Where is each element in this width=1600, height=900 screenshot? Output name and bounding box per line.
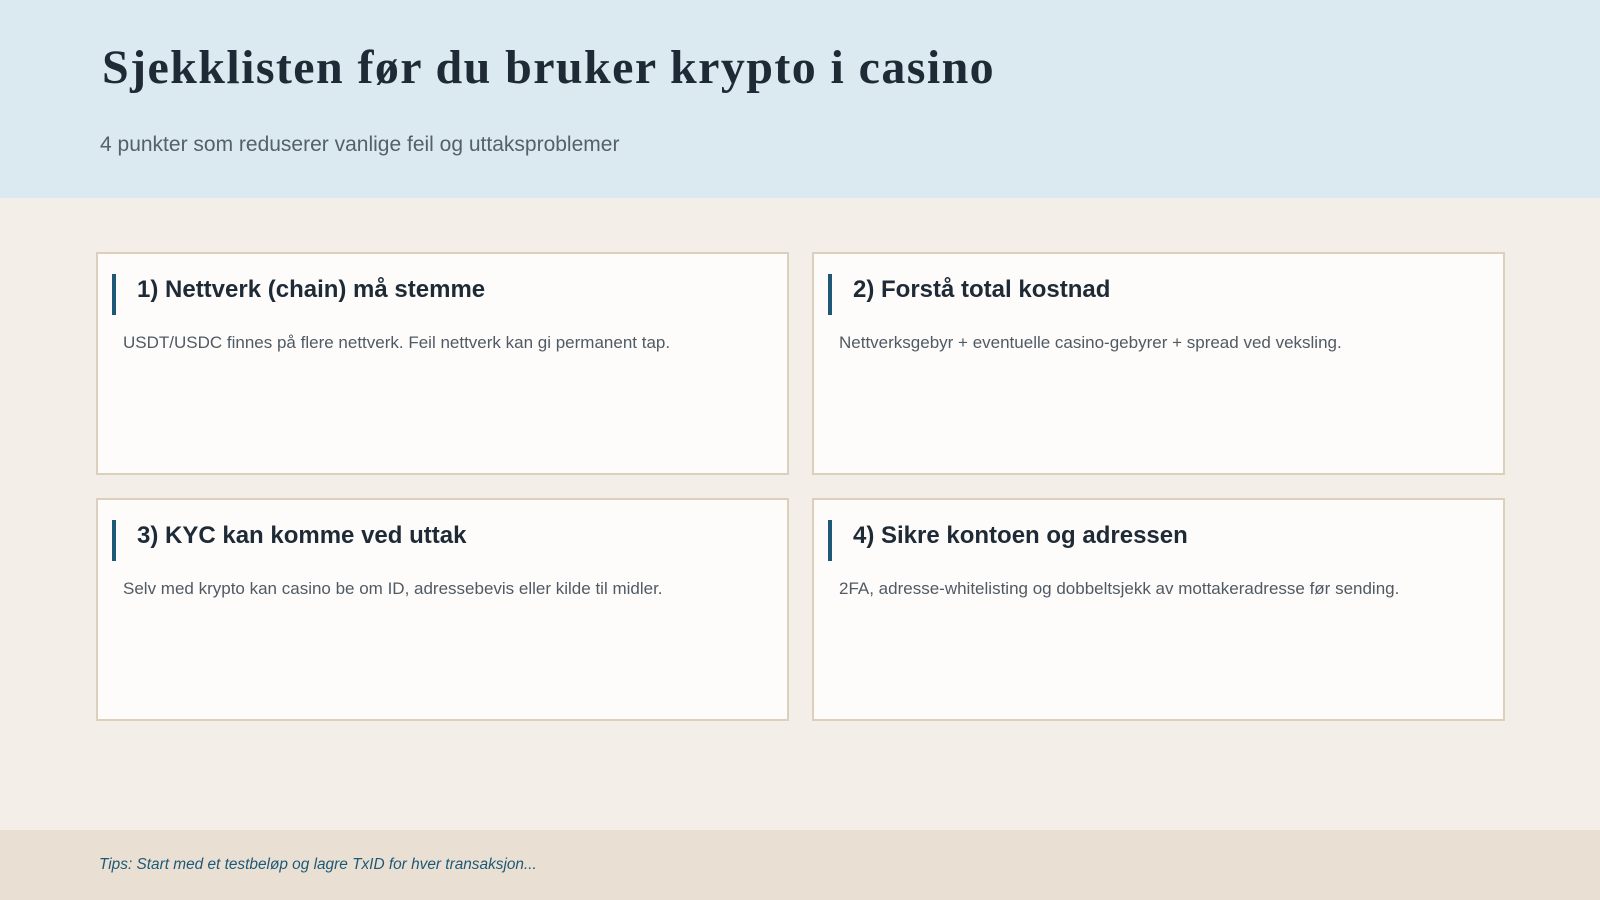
panel: cost [812, 252, 1505, 475]
heading: 4) Sikre kontoen og adressen [853, 522, 1188, 549]
accent bar [112, 274, 116, 315]
heading: 2) Forstå total kostnad [853, 276, 1110, 303]
footer [0, 830, 1600, 900]
heading: 1) Nettverk (chain) må stemme [137, 276, 485, 303]
text: Selv med krypto kan casino be om ID, adressebevis eller kilde til midler. [123, 579, 663, 598]
accent bar [112, 520, 116, 561]
header band [0, 0, 1600, 198]
panel: KYC [96, 498, 789, 721]
panel: security [812, 498, 1505, 721]
accent bar [828, 520, 832, 561]
heading: 3) KYC kan komme ved uttak [137, 522, 466, 549]
text: 2FA, adresse-whitelisting og dobbeltsjekk av mottakeradresse før sending. [839, 579, 1399, 598]
panel: network [96, 252, 789, 475]
accent bar [828, 274, 832, 315]
footer tip: Tips: Start med et testbeløp og lagre TxID for hver transaksjon... [99, 856, 537, 873]
subtitle: 4 punkter som reduserer vanlige feil og uttaksproblemer [100, 133, 619, 156]
text: Nettverksgebyr + eventuelle casino-gebyrer + spread ved veksling. [839, 333, 1342, 352]
title: Sjekklisten før du bruker krypto i casino [102, 41, 995, 94]
text: USDT/USDC finnes på flere nettverk. Feil nettverk kan gi permanent tap. [123, 333, 670, 352]
